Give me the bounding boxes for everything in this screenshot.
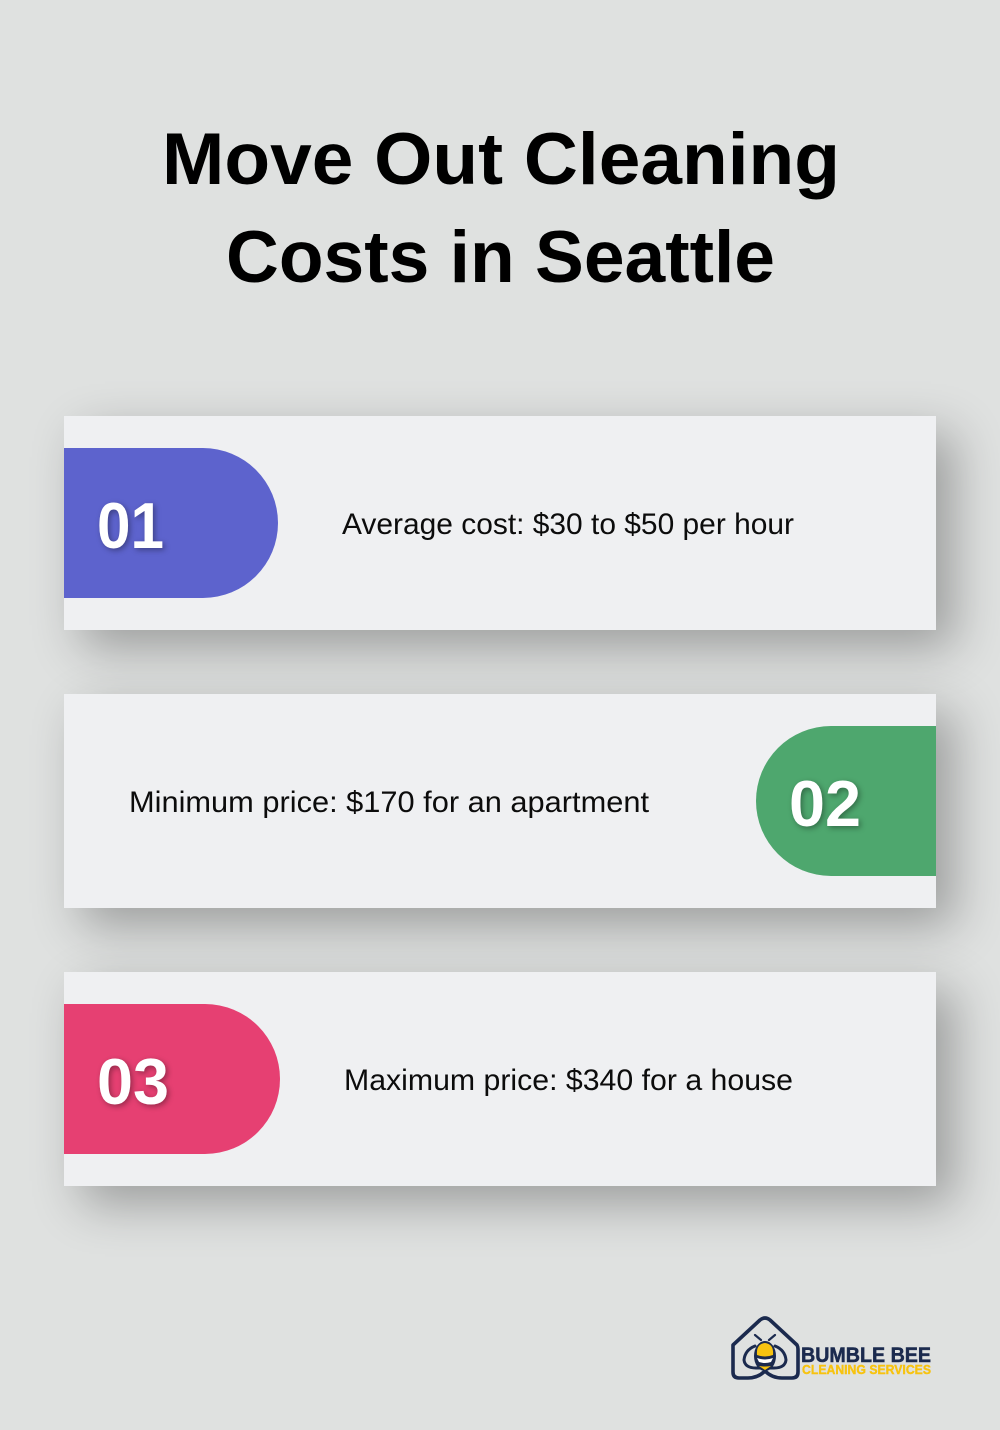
text: average cost [97, 489, 794, 562]
text: minimum price: 02 [789, 767, 861, 840]
icon: house outline with wings [733, 1318, 798, 1378]
logo tagline: CLEANING SERVICES [802, 1363, 931, 1377]
badge: 03 [64, 1004, 280, 1154]
title [162, 119, 840, 298]
icon: bee body [754, 1341, 776, 1371]
text: average cost: Average cost: $30 to $50 per hour [342, 508, 794, 541]
badge: 01 [64, 448, 278, 598]
logo wordmark: BUMBLE BEE [801, 1344, 931, 1367]
panel: minimum price [64, 694, 936, 908]
panel: average cost [64, 416, 936, 630]
badge: 02 [756, 726, 936, 876]
text: maximum price: 03 [97, 1045, 169, 1118]
text: minimum price [129, 767, 863, 840]
text: maximum price [97, 1045, 793, 1118]
text: minimum price: Minimum price: $170 for an apartment [129, 786, 650, 819]
title: Move Out Cleaning [162, 119, 840, 200]
text: maximum price: Maximum price: $340 for a house [344, 1064, 793, 1097]
panel: maximum price [64, 972, 936, 1186]
text: average cost: 01 [97, 489, 164, 562]
title: Costs in Seattle [226, 217, 775, 298]
